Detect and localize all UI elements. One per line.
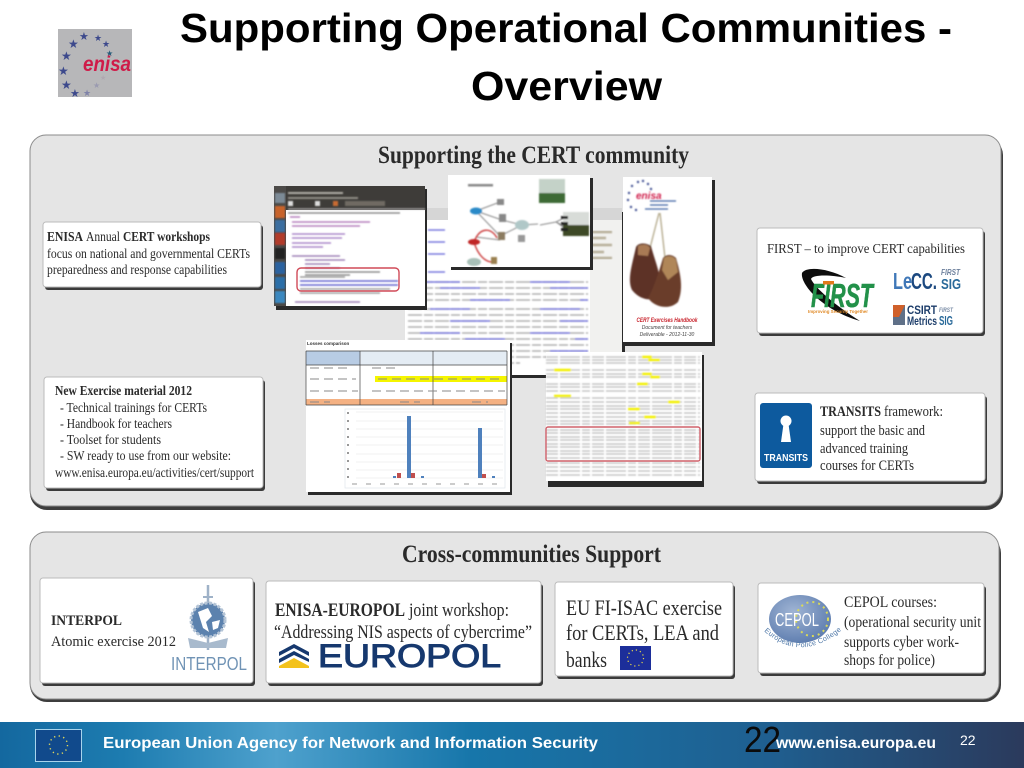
- card: ENISA annual CERT workshops: CERT workshops: [123, 230, 210, 245]
- icon: CEPOL logo: European Police College: [764, 628, 841, 648]
- card: ENISA-EUROPOL workshop: ENISA-EUROPOL: [275, 600, 405, 621]
- screenshot: CERT exercises handbook cover: Document for teachers: [642, 325, 693, 331]
- screenshot: terminal code editor: [274, 186, 427, 310]
- card: new exercise material 2012: - Toolset for students: [60, 433, 161, 448]
- icon: CSIRT Metrics SIG logo: CSIRT: [907, 305, 937, 317]
- footer text: agency name: European Union Agency for Network and Information Security: [103, 735, 598, 752]
- icon: enisa logo: ★: [94, 34, 102, 44]
- title: Supporting Operational Communities -: [180, 5, 952, 51]
- icon: CSIRT Metrics SIG logo: FIRST: [939, 308, 954, 314]
- icon: enisa logo: enisa: [83, 53, 131, 76]
- card: ENISA annual CERT workshops: focus on national and governmental CERTs: [47, 247, 250, 262]
- icon: enisa logo: ★: [106, 49, 113, 58]
- icon: INTERPOL emblem: [188, 585, 228, 650]
- card: TRANSITS framework: TRANSITS: [820, 404, 881, 420]
- card: new exercise material 2012: - Technical trainings for CERTs: [60, 401, 207, 416]
- card: new exercise material 2012: New Exercise material 2012: [55, 384, 192, 399]
- card: TRANSITS framework: support the basic and: [820, 423, 925, 439]
- card: EU FI-ISAC exercise: for CERTs, LEA and: [566, 620, 719, 645]
- icon: enisa logo: ★: [83, 89, 91, 99]
- icon: enisa logo: ★: [68, 37, 79, 51]
- card: INTERPOL: Atomic exercise 2012: [51, 634, 176, 650]
- icon: enisa logo: ★: [61, 49, 72, 63]
- footer text: website: www.enisa.europa.eu: [775, 735, 936, 752]
- card: new exercise material 2012: [44, 377, 265, 491]
- icon: CSIRT Metrics SIG logo: Metrics: [907, 316, 937, 328]
- card: EU FI-ISAC exercise: [555, 582, 735, 679]
- card: CEPOL courses: (operational security unit: [844, 614, 982, 631]
- card: ENISA annual CERT workshops: ENISA: [47, 230, 84, 245]
- title: [180, 5, 952, 109]
- screenshot: CERT exercises handbook cover: Deliverable - 2012-11-30: [640, 332, 695, 338]
- card: ENISA annual CERT workshops: Annual: [86, 230, 120, 245]
- icon: enisa logo: ★: [61, 78, 72, 92]
- card: TRANSITS framework: courses for CERTs: [820, 458, 914, 474]
- icon: enisa logo: ★: [102, 40, 110, 50]
- icon: enisa logo: ★: [58, 64, 69, 78]
- icon: LECC SIG logo: [893, 268, 961, 294]
- table: [306, 351, 507, 405]
- icon: LECC SIG logo: CC.: [911, 268, 937, 294]
- card: INTERPOL: [40, 578, 255, 686]
- screenshot: losses comparison spreadsheet and bar chart: Losses comparison: [307, 341, 350, 346]
- card: EU FI-ISAC exercise: EU FI-ISAC exercise: [566, 595, 722, 620]
- card: TRANSITS framework: framework:: [884, 404, 943, 420]
- screenshot: CERT exercises handbook cover: CERT Exercises Handbook: [636, 318, 698, 324]
- card: ENISA-EUROPOL workshop: “Addressing NIS aspects of cybercrime”: [274, 622, 532, 643]
- screenshot: log listing: [546, 352, 704, 487]
- icon: CSIRT Metrics SIG logo: SIG: [939, 313, 953, 328]
- card: CEPOL courses: [758, 582, 986, 676]
- icon: TRANSITS keyhole logo: TRANSITS: [764, 453, 808, 464]
- icon: TRANSITS keyhole logo: [760, 403, 812, 468]
- icon: enisa logo: ★: [100, 74, 106, 82]
- card: CEPOL courses: shops for police): [844, 652, 935, 669]
- icon: LECC SIG logo: SIG: [941, 276, 961, 293]
- icon: EUROPOL logo: EUROPOL: [318, 638, 501, 674]
- panel: supporting the CERT community: [30, 135, 1003, 510]
- card: ENISA annual CERT workshops: [43, 222, 263, 290]
- card: INTERPOL: INTERPOL: [171, 654, 247, 674]
- icon: FIRST logo: Improving Security Together: [808, 309, 868, 314]
- icon: CSIRT Metrics SIG logo: [893, 305, 954, 328]
- card: EU FI-ISAC exercise: banks: [566, 647, 607, 672]
- icon: FIRST logo: [802, 269, 875, 321]
- screenshot: CERT exercises handbook cover: enisa: [636, 191, 662, 202]
- card: TRANSITS framework: advanced training: [820, 441, 908, 457]
- icon: LECC SIG logo: FIRST: [941, 268, 961, 277]
- panel: cross-communities support: [30, 532, 1001, 702]
- card: FIRST: FIRST – to improve CERT capabilities: [767, 242, 965, 257]
- screenshot: network diagram: [448, 175, 593, 270]
- card: TRANSITS framework: [755, 393, 987, 484]
- bar chart: [345, 409, 505, 488]
- card: new exercise material 2012: www.enisa.europa.eu/activities/cert/support: [55, 466, 254, 481]
- icon: CEPOL logo: [764, 595, 841, 648]
- icon: CEPOL logo: CEPOL: [775, 610, 819, 630]
- icon: FIRST logo: FIRST: [811, 277, 875, 314]
- icon: enisa logo: [58, 29, 132, 100]
- icon: enisa logo: ★: [70, 87, 80, 100]
- card: INTERPOL: INTERPOL: [51, 613, 122, 629]
- title: Overview: [471, 63, 662, 109]
- card: CEPOL courses: CEPOL courses:: [844, 594, 937, 611]
- icon: EU flag footer: [36, 730, 82, 762]
- heading: supporting the CERT community: Supporting the CERT community: [378, 142, 689, 169]
- screenshot: web document listing: [405, 208, 625, 378]
- icon: enisa logo: ★: [93, 81, 100, 90]
- card: ENISA-EUROPOL workshop: [266, 581, 543, 686]
- card: new exercise material 2012: - Handbook for teachers: [60, 417, 172, 432]
- slide number large: 22: [744, 719, 781, 760]
- slide number small: 22: [960, 732, 976, 748]
- icon: LECC SIG logo: Le: [893, 268, 912, 294]
- icon: EU flag: [620, 646, 651, 670]
- screenshot: CERT exercises handbook cover: [623, 177, 715, 346]
- card: CEPOL courses: supports cyber work-: [844, 634, 959, 651]
- card: ENISA-EUROPOL workshop: joint workshop:: [408, 600, 509, 621]
- heading: cross-communities support: Cross-communities Support: [402, 541, 662, 568]
- card: ENISA annual CERT workshops: preparedness and response capabilities: [47, 263, 227, 278]
- card: FIRST: [757, 228, 985, 336]
- footer bar: [0, 719, 1024, 768]
- card: new exercise material 2012: - SW ready to use from our website:: [60, 449, 231, 464]
- screenshot: losses comparison spreadsheet and bar chart: [306, 340, 512, 495]
- icon: enisa logo: ★: [79, 30, 89, 43]
